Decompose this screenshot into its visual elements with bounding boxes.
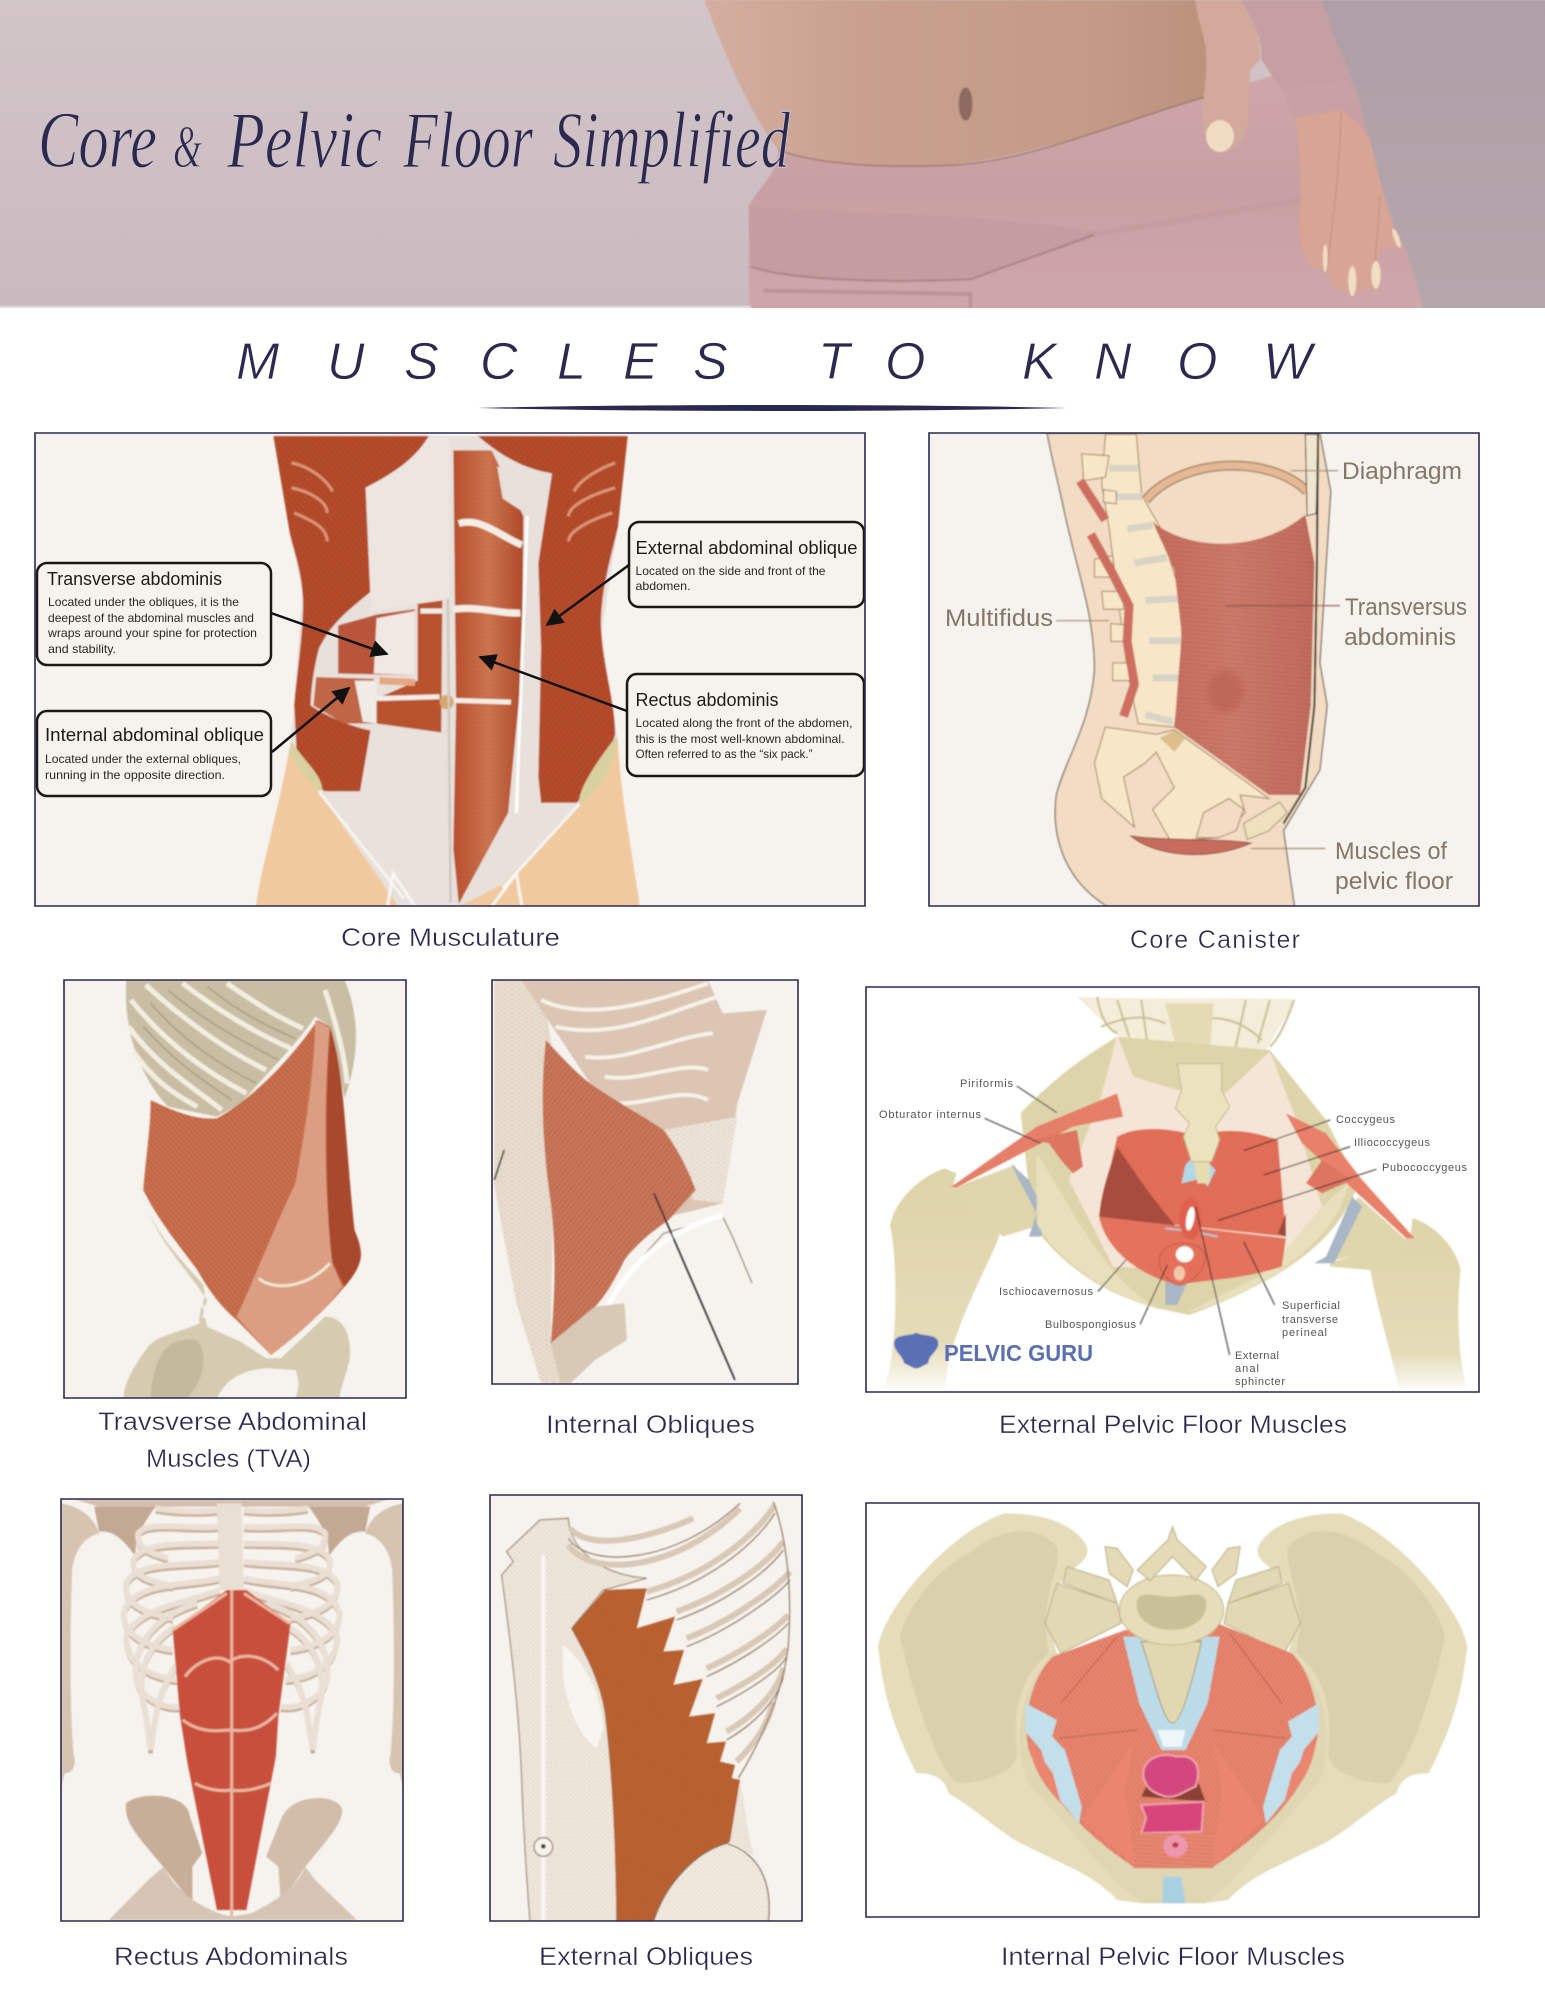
label: pelvic guru wordmark: PELVIC GURU [944,1340,1093,1366]
caption: external obliques: External Obliques [539,1943,753,1971]
side-view torso illustration [1047,433,1340,906]
label: coccygeus: Coccygeus [1336,1114,1396,1126]
panel: core canister [929,433,1479,906]
internal obliques illustration [494,980,767,1383]
label: muscles of pelvic floor: Muscles of [1335,838,1447,865]
panel: external pelvic floor muscles [866,987,1479,1392]
callout: rectus abdominis: Often referred to as the “six pack.” [636,747,812,761]
label: superficial transverse perineal: perineal [1282,1327,1327,1339]
label: muscles of pelvic floor [1335,838,1453,895]
callout: internal abdominal oblique: Internal abdominal oblique [45,725,264,745]
panel: internal pelvic floor muscles [866,1503,1479,1917]
panel: transverse abdominal muscles [64,980,406,1398]
title: Floor [402,96,533,185]
callout: transverse abdominis: Located under the obliques, it is the [48,595,239,609]
label: diaphragm: Diaphragm [1342,458,1462,485]
label: external anal sphincter: External [1235,1350,1279,1362]
label: transversus abdominis [1345,598,1466,645]
caption: rectus abdominals: Rectus Abdominals [114,1943,348,1971]
caption: transverse abdominal muscles [98,1408,367,1473]
internal pelvic illustration [878,1513,1467,1903]
label: superficial transverse perineal: transverse [1282,1314,1338,1326]
title: Pelvic [226,96,382,185]
caption: transverse abdominal muscles: Muscles (TVA) [146,1445,311,1473]
label: illiococcygeus: Illiococcygeus [1354,1137,1430,1149]
arrow: transverse abdominis [271,613,387,654]
torso illustration [256,436,640,906]
caption: external pelvic floor muscles: External Pelvic Floor Muscles [999,1411,1347,1439]
callout: transverse abdominis [37,563,271,665]
callout: external abdominal oblique: abdomen. [636,579,690,593]
callout: internal abdominal oblique [37,711,271,796]
rectus illustration [61,1499,403,1920]
title [42,110,790,184]
callout: external abdominal oblique: External abdominal oblique [636,538,858,558]
label: piriformis: Piriformis [960,1078,1014,1090]
callout: transverse abdominis: Transverse abdominis [47,569,222,589]
arrow: rectus abdominis [480,657,627,711]
heading underline [478,405,1067,411]
external obliques illustration [502,1502,790,1922]
label: transversus abdominis: abdominis [1344,624,1456,651]
pelvic floor illustration [884,997,1467,1387]
label: external anal sphincter: anal [1235,1363,1259,1375]
callout: external abdominal oblique: Located on the side and front of the [636,564,826,578]
callout: external abdominal oblique [629,522,864,607]
title: Core [38,96,157,185]
title: Simplified [553,96,790,185]
callout: rectus abdominis: this is the most well-known abdominal. [636,732,844,746]
panel: core musculature [35,433,865,906]
caption: transverse abdominal muscles: Travsverse Abdominal [98,1408,367,1436]
label: external anal sphincter: sphincter [1235,1376,1285,1388]
callout: transverse abdominis: wraps around your spine for protection [47,626,257,640]
label: external anal sphincter [1235,1350,1285,1388]
label: muscles of pelvic floor: pelvic floor [1335,868,1453,895]
caption: core canister: Core Canister [1130,926,1300,954]
label: transversus abdominis: Transversus [1345,594,1467,621]
caption: core musculature: Core Musculature [341,924,560,952]
panel: internal obliques [492,980,798,1384]
section heading: MUSCLES TO KNOW [236,333,1317,391]
label: superficial transverse perineal [1282,1300,1340,1339]
caption: internal pelvic floor muscles: Internal Pelvic Floor Muscles [1001,1943,1345,1971]
callout: rectus abdominis [627,674,864,776]
label: obturator internus: Obturator internus [879,1109,982,1121]
TVA illustration [124,980,361,1398]
panel: external obliques [490,1495,802,1922]
icon: pelvic guru logo [894,1333,938,1368]
header banner with photo [0,0,1545,310]
callout: transverse abdominis: deepest of the abdominal muscles and [48,611,254,625]
panel: rectus abdominals [61,1499,403,1921]
label: superficial transverse perineal: Superficial [1282,1300,1340,1312]
callout: internal abdominal oblique: running in the opposite direction. [45,768,225,782]
caption: internal obliques: Internal Obliques [546,1411,755,1439]
title: & [173,115,202,181]
label: ischiocavernosus: Ischiocavernosus [999,1286,1094,1298]
arrow: internal oblique [272,688,349,752]
label: bulbospongiosus: Bulbospongiosus [1045,1319,1136,1331]
label: multifidus: Multifidus [945,605,1053,632]
callout: rectus abdominis: Located along the front of the abdomen, [636,716,852,730]
callout: internal abdominal oblique: Located under the external obliques, [45,752,241,766]
label: pubococcygeus: Pubococcygeus [1382,1162,1468,1174]
callout: transverse abdominis: and stability. [48,642,116,656]
callout: rectus abdominis: Rectus abdominis [636,690,778,710]
arrow: external oblique [547,565,629,625]
